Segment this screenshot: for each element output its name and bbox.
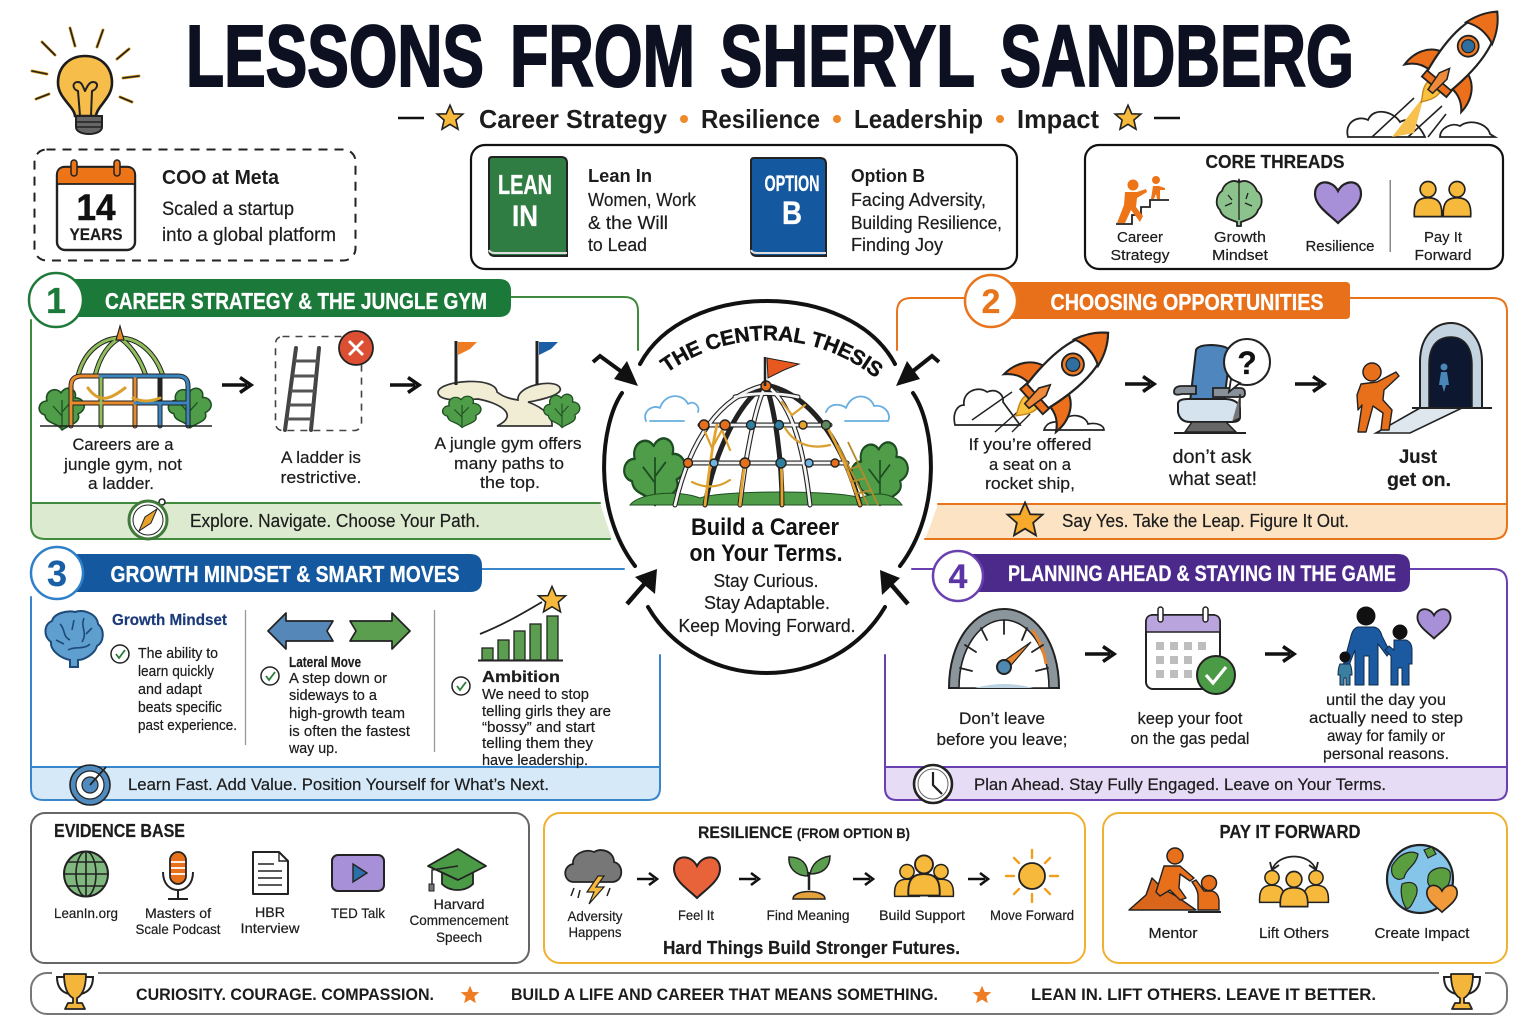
icon: trophy left	[52, 970, 98, 1009]
text: growth mindset body: The ability to	[138, 646, 218, 662]
icon: mentor	[1129, 848, 1221, 912]
text: description	[162, 199, 336, 246]
number badge 4	[933, 551, 983, 601]
labels: evidence base: Commencement	[410, 912, 509, 928]
arrow: from panel 3	[627, 569, 657, 604]
labels: resilience steps: Feel It	[678, 907, 714, 923]
text: keep your foot: keep your foot	[1138, 710, 1243, 728]
dividers	[246, 610, 434, 752]
icon: ladder crossed out	[276, 331, 373, 430]
icon: video	[332, 855, 384, 891]
icon: career strategy	[1116, 176, 1169, 224]
arrow	[1295, 376, 1324, 392]
text: ambition body: telling girls they are	[482, 704, 611, 720]
icon: brain	[1217, 180, 1262, 226]
labels: resilience steps: Adversity	[568, 908, 622, 924]
text: lateral move body: is often the fastest	[289, 724, 410, 740]
arrow	[1265, 646, 1294, 662]
number badge 2: 2	[982, 283, 1000, 321]
text: ladder is restrictive: restrictive.	[280, 468, 362, 487]
icon: lateral move arrows	[268, 613, 410, 649]
labels: evidence base: Speech	[436, 929, 482, 945]
text: offered a seat: rocket ship,	[985, 474, 1075, 493]
panel 4: planning ahead	[885, 551, 1507, 803]
text: lateral move body	[288, 671, 410, 757]
text: growth mindset body: learn quickly	[138, 664, 215, 680]
text: don't leave	[936, 710, 1068, 749]
labels: pay it forward: Lift Others	[1259, 925, 1329, 942]
arrow	[1085, 646, 1114, 662]
icon: pay it forward people	[1414, 181, 1471, 217]
title	[186, 8, 1354, 105]
text: Option B: Facing Adversity,	[851, 190, 986, 210]
heading pill 4	[965, 554, 1410, 592]
heading: pay it forward: PAY IT FORWARD	[1220, 822, 1360, 842]
icon: Lean In book: LEAN	[498, 169, 552, 200]
text: lateral move body: sideways to a	[289, 688, 378, 704]
heading: ambition: Ambition	[482, 669, 560, 686]
text: careers are a jungle gym: Careers are a	[72, 435, 174, 454]
text: Lean In: to Lead	[588, 235, 647, 255]
text: just get on: get on.	[1387, 470, 1451, 491]
text: don't ask what seat	[1168, 447, 1257, 490]
text: ambition body	[482, 687, 611, 769]
icon: rocket ship	[954, 304, 1134, 445]
text: don't leave: Don’t leave	[959, 710, 1045, 728]
title: SHERYL	[720, 8, 975, 105]
heading pill 4: PLANNING AHEAD & STAYING IN THE GAME	[1008, 561, 1396, 586]
text: ambition body: “bossy” and start	[482, 720, 595, 736]
text: curiosity: CURIOSITY. COURAGE. COMPASSION.	[136, 985, 434, 1004]
icon: sprout	[789, 856, 830, 899]
heading: lateral move: Lateral Move	[289, 654, 361, 671]
icon: star	[1007, 502, 1043, 535]
icon: star right	[1115, 105, 1141, 129]
text: stay curious: Keep Moving Forward.	[678, 616, 856, 636]
central thesis circle	[592, 299, 940, 675]
text: strip 4: Plan Ahead. Stay Fully Engaged. Leave on Your Terms.	[974, 775, 1386, 794]
text: until the day: actually need to step	[1309, 710, 1463, 727]
heading: growth mindset: Growth Mindset	[112, 612, 228, 629]
text: jungle gym offers many paths: many paths to	[454, 454, 564, 473]
text: growth mindset body	[138, 646, 237, 734]
labels: core threads: Resilience	[1306, 238, 1374, 255]
icon: Lean In book: IN	[512, 200, 538, 233]
arc guide	[663, 340, 878, 380]
arrow: from panel 2	[896, 356, 939, 386]
labels: core threads: Career	[1117, 229, 1163, 246]
text: description: Scaled a startup	[162, 199, 294, 220]
icon: calendar 14 years: YEARS	[70, 225, 122, 244]
icon: dome climber	[624, 357, 908, 505]
text: growth mindset body: past experience.	[138, 718, 237, 734]
text: Lean In	[588, 166, 697, 255]
arrow: from panel 4	[880, 570, 908, 604]
text: jungle gym offers many paths: A jungle gym offers	[434, 434, 582, 453]
divider	[1390, 180, 1391, 252]
icon: Lean In book	[489, 157, 567, 256]
bullet	[680, 115, 688, 123]
text: offered a seat	[968, 435, 1092, 493]
heading pill 1: CAREER STRATEGY & THE JUNGLE GYM	[105, 288, 487, 314]
subtitle: leadership: Leadership	[854, 104, 983, 134]
text: ambition body: telling them they	[482, 736, 594, 752]
heading: core threads: CORE THREADS	[1206, 152, 1344, 172]
labels: evidence base: Interview	[240, 920, 300, 936]
arrow	[390, 378, 419, 392]
bullet	[833, 115, 841, 123]
icon: target	[70, 765, 110, 805]
number badge 3	[31, 547, 83, 599]
subtitle: impact: Impact	[1017, 104, 1099, 134]
text: stay curious	[678, 571, 856, 636]
icon: check	[452, 677, 470, 695]
text: keep your foot	[1130, 710, 1250, 748]
text: lateral move body: high-growth team	[289, 706, 405, 722]
text: Option B: Building Resilience,	[851, 213, 1002, 233]
text: strip 1: Explore. Navigate. Choose Your Path.	[190, 511, 480, 531]
text: jungle gym offers many paths: the top.	[480, 473, 540, 492]
text: until the day: personal reasons.	[1323, 746, 1449, 763]
footer banner	[31, 970, 1507, 1014]
heading pill 2: CHOOSING OPPORTUNITIES	[1050, 289, 1324, 315]
text: don't leave: before you leave;	[936, 731, 1068, 749]
labels: evidence base: HBR	[255, 904, 285, 920]
text: careers are a jungle gym: jungle gym, not	[63, 455, 182, 474]
title: LESSONS	[186, 8, 484, 105]
text: ladder is restrictive: A ladder is	[281, 448, 361, 467]
icon: star	[973, 986, 991, 1003]
text: jungle gym offers many paths	[434, 434, 582, 492]
icon: light bulb	[32, 28, 139, 134]
icon: family	[1338, 606, 1412, 685]
icon: compass	[129, 499, 167, 539]
heading pill 3	[60, 554, 482, 592]
labels: core threads: Forward	[1414, 247, 1472, 264]
icon: trophy right	[1439, 970, 1485, 1009]
number badge 4: 4	[949, 558, 968, 596]
heading: the central thesis: THE CENTRAL THESIS	[658, 326, 882, 376]
icon: heart	[1315, 182, 1361, 223]
strip 1	[31, 503, 612, 539]
arrow	[853, 873, 873, 885]
number badge 2	[965, 275, 1017, 327]
panel: resilience	[544, 813, 1085, 963]
labels: resilience steps: Happens	[568, 924, 622, 940]
icon: seat with question bubble: ?	[1237, 345, 1257, 381]
labels: evidence base: Harvard	[434, 896, 484, 912]
text: ladder is restrictive	[280, 448, 362, 487]
panel: books	[471, 145, 1017, 269]
text: lateral move body: A step down or	[289, 671, 387, 687]
icon: calendar 14 years: 14	[76, 187, 116, 228]
title: SANDBERG	[1000, 8, 1354, 105]
icon: sun	[1006, 850, 1058, 902]
strip 3	[31, 767, 660, 800]
panel 1: career strategy	[29, 273, 638, 539]
icon: calendar with check	[1146, 607, 1235, 694]
text: role: COO at Meta	[162, 167, 280, 189]
icon: seat with question bubble	[1174, 339, 1270, 433]
arrow	[637, 873, 657, 885]
icon: Option B book: OPTION	[764, 171, 820, 196]
text: careers are a jungle gym: a ladder.	[88, 474, 154, 493]
text: keep your foot: on the gas pedal	[1130, 730, 1250, 748]
text: ambition body: We need to stop	[482, 687, 589, 703]
text: stay curious: Stay Adaptable.	[704, 593, 830, 613]
text: offered a seat: a seat on a	[989, 455, 1072, 474]
heading: resilience: RESILIENCE (FROM OPTION B)	[698, 823, 910, 842]
icon: calendar 14 years	[57, 160, 135, 250]
text: growth mindset body: and adapt	[138, 682, 202, 698]
text: build a career: Build a Career	[691, 514, 839, 541]
text: Lean In: Women, Work	[588, 190, 697, 210]
labels: core threads: Strategy	[1110, 247, 1170, 264]
text: Lean In: & the Will	[588, 213, 668, 233]
icon: lift others	[1260, 856, 1328, 907]
arrow: from panel 1	[593, 356, 638, 386]
icon: microphone	[163, 852, 193, 899]
icon: storm cloud	[565, 850, 621, 904]
arrow	[222, 378, 251, 392]
icon: globe with heart	[1387, 845, 1457, 913]
subtitle row	[398, 104, 1180, 134]
title: FROM	[510, 8, 695, 105]
panel: evidence base	[31, 813, 529, 963]
text: careers are a jungle gym	[63, 435, 182, 493]
labels: pay it forward: Create Impact	[1374, 925, 1470, 942]
heading pill 2	[995, 282, 1350, 319]
labels: resilience steps: Build Support	[879, 907, 965, 923]
icon: Option B book: B	[782, 195, 802, 231]
subtitle: resilience: Resilience	[701, 104, 820, 134]
labels: evidence base: Scale Podcast	[136, 921, 221, 937]
icon: person boarding door	[1357, 323, 1492, 433]
icon: clock	[914, 765, 952, 803]
icon: purple heart	[1417, 609, 1451, 638]
labels: evidence base	[54, 896, 509, 945]
text: until the day: until the day you	[1326, 692, 1446, 709]
text: strip 2: Say Yes. Take the Leap. Figure It Out.	[1062, 511, 1349, 531]
number badge 3: 3	[47, 553, 67, 594]
text: until the day	[1309, 692, 1463, 763]
text: lateral move body: way up.	[288, 741, 338, 757]
circle arcs	[604, 301, 931, 673]
strip 2	[925, 504, 1507, 539]
panel 3: growth mindset	[31, 547, 660, 805]
text: until the day: away for family or	[1327, 728, 1446, 745]
labels: evidence base: Masters of	[145, 905, 211, 921]
text: ambition body: have leadership.	[482, 753, 588, 769]
text: build a career	[690, 514, 842, 567]
strip 4	[885, 767, 1507, 800]
icon: star left	[437, 105, 463, 129]
number badge 1	[29, 273, 83, 327]
text: stay curious: Stay Curious.	[714, 571, 818, 591]
labels: resilience steps	[568, 907, 1074, 940]
labels: pay it forward: Mentor	[1148, 925, 1198, 942]
text: offered a seat: If you’re offered	[968, 435, 1092, 454]
labels: core threads	[1110, 229, 1472, 264]
labels: evidence base: LeanIn.org	[54, 905, 118, 921]
icon: ambition chart	[478, 586, 566, 660]
text: Option B	[851, 166, 1002, 255]
heading pill 3: GROWTH MINDSET & SMART MOVES	[110, 561, 460, 587]
text: just get on: Just	[1399, 447, 1438, 468]
icon: speedometer	[949, 609, 1059, 688]
icon: jungle gym	[39, 326, 212, 430]
text: Option B: Finding Joy	[851, 235, 943, 255]
labels: pay it forward	[1148, 925, 1470, 942]
labels: resilience steps: Move Forward	[990, 907, 1074, 923]
panel 2: choosing opportunities	[897, 275, 1507, 539]
text: description: into a global platform	[162, 225, 336, 246]
icon: paths with flags	[438, 341, 580, 428]
arrow	[739, 873, 759, 885]
text: growth mindset body: beats specific	[138, 700, 222, 716]
text: Lean In: Lean In	[588, 166, 652, 186]
icon: red heart	[674, 857, 720, 898]
text: Option B: Option B	[851, 166, 925, 186]
labels: core threads: Pay It	[1424, 229, 1463, 246]
text: hard things: Hard Things Build Stronger Futures.	[663, 938, 960, 958]
bullet	[996, 115, 1004, 123]
panel: pay it forward	[1103, 813, 1507, 963]
icon: check	[111, 645, 129, 663]
icon: document	[253, 852, 288, 894]
text: lean in: LEAN IN. LIFT OTHERS. LEAVE IT BETTER.	[1031, 985, 1376, 1004]
icon: check	[261, 667, 279, 685]
icon: support group	[895, 855, 953, 896]
panel: 14 years at Meta	[34, 150, 356, 260]
text: build a life: BUILD A LIFE AND CAREER THAT MEANS SOMETHING.	[511, 985, 938, 1004]
icon: star	[461, 986, 479, 1003]
heading pill 1	[60, 279, 511, 317]
icon: graduation cap	[428, 849, 486, 891]
labels: resilience steps: Find Meaning	[766, 907, 850, 923]
heading: evidence base: EVIDENCE BASE	[54, 821, 185, 841]
labels: core threads: Mindset	[1212, 247, 1269, 264]
icon: globe	[64, 852, 108, 896]
text: don't ask what seat: what seat!	[1168, 469, 1257, 490]
panel: core threads	[1085, 145, 1503, 269]
number badge 1: 1	[46, 280, 66, 321]
text: just get on	[1387, 447, 1451, 491]
labels: core threads: Growth	[1214, 229, 1266, 246]
labels: evidence base: TED Talk	[331, 905, 386, 921]
icon: rocket with smoke	[1347, 0, 1526, 137]
text: strip 3: Learn Fast. Add Value. Position Yourself for What’s Next.	[128, 775, 549, 794]
text: don't ask what seat: don’t ask	[1172, 447, 1252, 468]
arrow	[1125, 376, 1154, 392]
icon: blue brain	[45, 611, 103, 667]
text: build a career: on Your Terms.	[690, 540, 842, 567]
subtitle: career strategy: Career Strategy	[479, 104, 668, 134]
arrow	[968, 873, 988, 885]
icon: Option B book	[751, 158, 826, 256]
